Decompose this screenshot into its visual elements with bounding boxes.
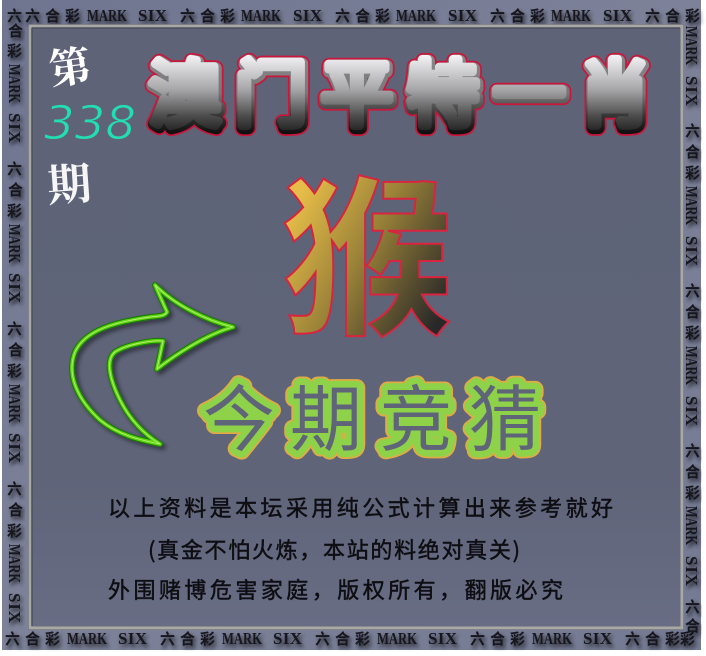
- bottom border text: [5, 628, 695, 649]
- slogan: 今期竞猜: 今期竞猜: [203, 361, 541, 466]
- right border text: 彩: [685, 322, 700, 343]
- right border text: 彩: [685, 482, 700, 503]
- bottom border text: SIX: [273, 629, 303, 648]
- disclaimer text: (真金不怕火炼，本站的料绝对真关): [148, 533, 520, 565]
- left border text: MARK: [5, 64, 24, 104]
- title: 澳门平特一肖: 澳门平特一肖: [150, 38, 652, 143]
- bottom border text: SIX: [118, 629, 148, 648]
- left border text: 合: [8, 499, 23, 520]
- bottom border text: MARK: [222, 629, 263, 648]
- top border text: 六合彩: [25, 5, 80, 26]
- slogan: 今期竞猜: 今期竞猜: [203, 361, 541, 466]
- right border text: 合: [685, 461, 700, 482]
- right border text: SIX: [682, 76, 701, 107]
- bottom border text: SIX: [583, 629, 613, 648]
- right border text: MARK: [682, 346, 701, 386]
- top border text: [7, 5, 700, 26]
- top border text: MARK: [551, 6, 592, 25]
- top border text: SIX: [138, 6, 168, 25]
- right border text: 合: [685, 301, 700, 322]
- bottom border text: 六合彩: [5, 628, 60, 649]
- right border text: MARK: [682, 506, 701, 546]
- left border text: 六: [7, 478, 22, 499]
- top border text: 六合彩: [490, 5, 545, 26]
- bottom border text: 六合彩: [625, 628, 680, 649]
- right border text: 六: [685, 596, 700, 617]
- left border text: 彩: [7, 40, 22, 61]
- top border text: MARK: [241, 6, 282, 25]
- right border text: 合: [685, 615, 700, 636]
- left border text: MARK: [5, 224, 24, 264]
- bottom border text: MARK: [377, 629, 418, 648]
- bottom border text: 六合彩: [160, 628, 215, 649]
- issue label: 第: 第: [45, 32, 95, 98]
- top border text: SIX: [448, 6, 478, 25]
- left border text: SIX: [5, 433, 24, 464]
- right border text: SIX: [682, 396, 701, 427]
- main character: 猴: 猴: [281, 121, 453, 371]
- left border text: 彩: [7, 360, 22, 381]
- left border text: 合: [8, 339, 23, 360]
- disclaimer text: 外围赌博危害家庭，版权所有，翻版必究: [108, 573, 563, 605]
- left border text: SIX: [5, 113, 24, 144]
- left border text: MARK: [5, 544, 24, 584]
- right border text: MARK: [682, 186, 701, 226]
- bottom border text: 彩: [680, 628, 695, 649]
- top border text: 六: [7, 5, 22, 26]
- bottom border text: 六合彩: [470, 628, 525, 649]
- issue number: 338: 338: [44, 96, 136, 150]
- title: 澳门平特一肖: 澳门平特一肖: [149, 36, 651, 141]
- top border text: SIX: [603, 6, 633, 25]
- top border text: 六合彩: [335, 5, 390, 26]
- bottom border text: SIX: [428, 629, 458, 648]
- right border text: SIX: [682, 236, 701, 267]
- right border text: 六: [685, 440, 700, 461]
- left border text: [5, 20, 24, 624]
- right border text: 六: [685, 280, 700, 301]
- left border text: SIX: [5, 273, 24, 304]
- top border text: SIX: [293, 6, 323, 25]
- bottom border text: MARK: [67, 629, 108, 648]
- right border text: [682, 26, 701, 636]
- slogan: 今期竞猜: 今期竞猜: [203, 361, 541, 466]
- left border text: 六: [7, 158, 22, 179]
- bottom border text: MARK: [532, 629, 573, 648]
- right border text: 合: [685, 141, 700, 162]
- right border text: 彩: [685, 162, 700, 183]
- icon: green curved arrow: [72, 285, 233, 444]
- left border text: 彩: [7, 200, 22, 221]
- top border text: 六合彩: [645, 5, 700, 26]
- left border text: 六: [7, 318, 22, 339]
- top border text: MARK: [87, 6, 128, 25]
- left border text: SIX: [5, 593, 24, 624]
- disclaimer text: [108, 491, 613, 605]
- left border text: 合: [8, 20, 23, 41]
- disclaimer text: 以上资料是本坛采用纯公式计算出来参考就好: [108, 491, 613, 523]
- left border text: 彩: [7, 520, 22, 541]
- right border text: MARK: [682, 26, 701, 66]
- left border text: 合: [8, 179, 23, 200]
- top border text: 六合彩: [180, 5, 235, 26]
- title: 澳门平特一肖: 澳门平特一肖: [150, 38, 652, 143]
- issue label: 期: 期: [45, 148, 93, 215]
- right border text: SIX: [682, 556, 701, 587]
- right border text: 六: [685, 120, 700, 141]
- top border text: MARK: [396, 6, 437, 25]
- left border text: MARK: [5, 384, 24, 424]
- bottom border text: 六合彩: [315, 628, 370, 649]
